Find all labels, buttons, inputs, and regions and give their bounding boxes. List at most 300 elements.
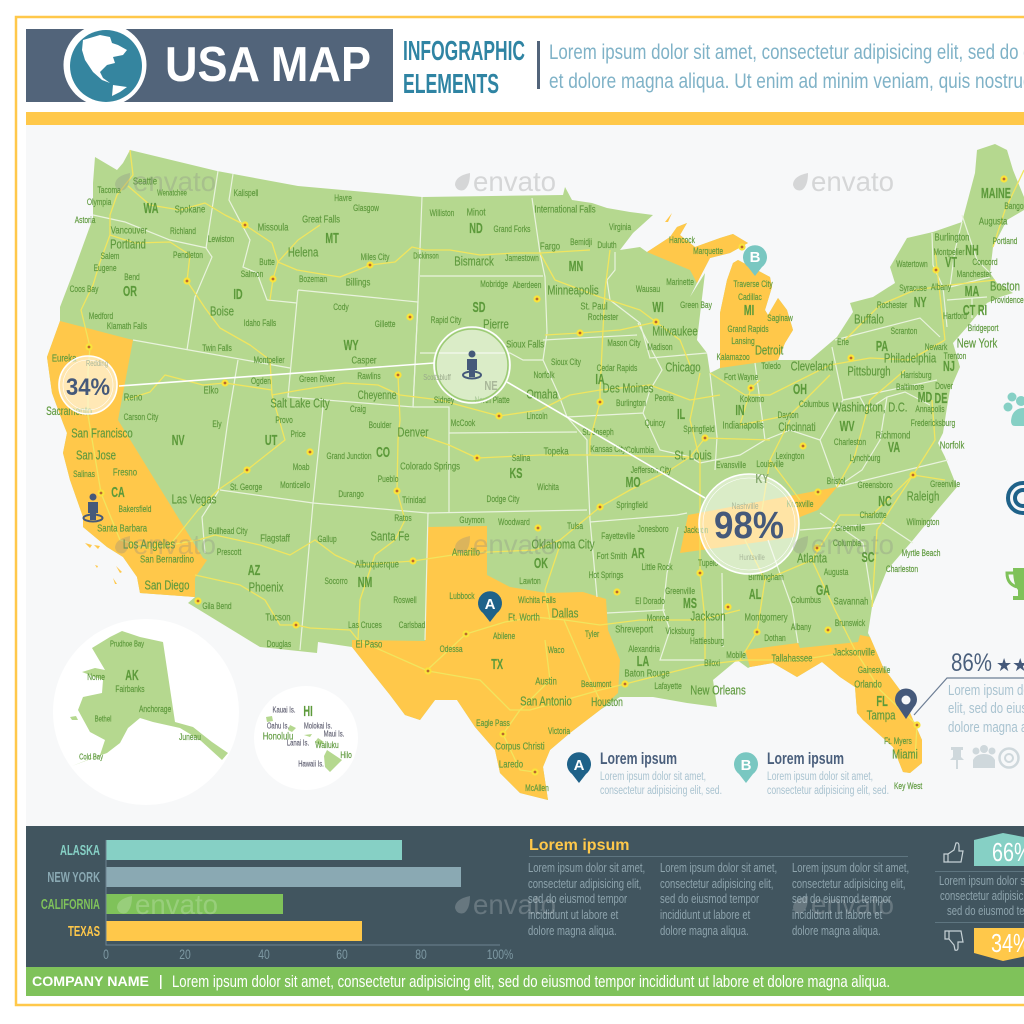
city and state labels: Sioux Falls — [506, 338, 544, 350]
legend: B: Lorem ipsum — [767, 749, 844, 768]
city and state labels: VT — [945, 254, 957, 270]
city and state labels: Olympia — [87, 197, 112, 207]
city and state labels: Tulsa — [567, 521, 584, 531]
city and state labels: Chicago — [665, 361, 701, 375]
city and state labels: Jefferson City — [631, 465, 671, 475]
city and state labels: Sacramento — [46, 406, 92, 418]
bar chart: ALASKA — [60, 842, 100, 859]
city and state labels: Pueblo — [378, 474, 399, 484]
city and state labels: Kansas City — [590, 444, 626, 454]
city and state labels: Hartford — [943, 311, 967, 321]
city and state labels: San Francisco — [71, 427, 133, 441]
city and state labels: Marquette — [693, 246, 724, 256]
city and state labels: Gillette — [375, 319, 396, 329]
city and state labels: NJ — [943, 358, 955, 374]
highlighted state: Tennessee — [680, 487, 837, 553]
city and state labels: Philadelphia — [884, 352, 937, 366]
legend: B: Lorem ipsum dolor sit amet, — [767, 771, 873, 783]
callout: person marker: NE — [484, 380, 498, 393]
city and state labels: Bismarck — [454, 255, 494, 269]
watermarks: envato — [811, 166, 894, 197]
city and state labels: TX — [491, 656, 504, 672]
city and state labels: SD — [473, 299, 485, 315]
city and state labels: Santa Barbara — [97, 522, 148, 534]
bar chart: 20 — [179, 946, 191, 962]
watermarks: envato — [473, 166, 556, 197]
city and state labels: Casper — [351, 354, 377, 366]
city and state labels: Bemidji — [570, 237, 592, 247]
header divider — [537, 41, 540, 89]
city and state labels: Birmingham — [748, 572, 784, 582]
city and state labels: St. George — [230, 482, 263, 492]
city and state labels: Minot — [467, 206, 486, 218]
city and state labels: Seattle — [133, 175, 157, 187]
city and state labels: Montpelier — [254, 355, 285, 365]
watermarks on dark panel: envato — [473, 889, 556, 920]
subtitle: INFOGRAPHIC — [403, 35, 525, 66]
city and state labels: El Dorado — [635, 596, 665, 606]
city and state labels: Houston — [591, 697, 623, 709]
city and state labels: Rochester — [588, 312, 619, 322]
city and state labels: St. Joseph — [582, 427, 614, 437]
callout: 98%: KY — [755, 473, 769, 486]
city and state labels: Rapid City — [431, 315, 461, 325]
city and state labels: Gainesville — [858, 665, 891, 675]
bar chart — [41, 840, 513, 962]
icon: target — [1008, 483, 1024, 513]
footer bar: COMPANY NAME — [32, 973, 149, 989]
icons: row of grey symbols — [950, 745, 1018, 769]
city and state labels: Montpelier — [934, 247, 965, 257]
city and state labels: Gila Bend — [202, 601, 232, 611]
city and state labels: Buffalo — [854, 313, 884, 327]
text block: Lorem ipsum columns: consectetur adipisicing elit, — [528, 878, 641, 891]
city and state labels: IA — [595, 371, 605, 387]
city and state labels: WI — [652, 299, 664, 315]
icon: people teal — [1004, 392, 1024, 426]
city and state labels: Washington, D.C. — [833, 401, 907, 415]
city and state labels: Great Falls — [302, 213, 340, 225]
city and state labels: Milwaukee — [652, 325, 698, 339]
bar chart: 60 — [336, 946, 348, 962]
city and state labels: North Platte — [475, 395, 510, 405]
city and state labels: San Diego — [145, 579, 189, 593]
legend: A — [567, 749, 722, 797]
legend: A: Lorem ipsum dolor sit amet, — [600, 771, 706, 783]
icon: pin B on map — [743, 245, 767, 276]
city and state labels: WA — [144, 200, 158, 216]
city and state labels: Cadillac — [738, 292, 762, 302]
city and state labels: Sioux City — [551, 357, 581, 367]
city and state labels: Green Bay — [680, 300, 712, 310]
text block: Lorem ipsum columns: consectetur adipisicing elit, — [660, 878, 773, 891]
city and state labels: St. Paul — [580, 300, 608, 312]
city and state labels: Grand Junction — [326, 451, 372, 461]
city and state labels: Dayton — [777, 410, 799, 420]
state borders — [93, 171, 990, 660]
watermarks on dark panel: envato — [811, 889, 894, 920]
legend: B: consectetur adipisicing elit, sed. — [767, 785, 889, 797]
city and state labels: Tacoma — [97, 185, 121, 195]
icon: pin A on map — [478, 591, 502, 622]
city and state labels: Santa Fe — [371, 530, 409, 544]
city and state labels: MN — [569, 258, 583, 274]
text block: Lorem ipsum columns: sed do eiusmod tempor — [528, 893, 627, 906]
city and state labels: Dover — [935, 381, 953, 391]
city and state labels: Watertown — [896, 259, 928, 269]
city and state labels: MA — [965, 283, 979, 299]
city and state labels: Odessa — [440, 644, 463, 654]
watermarks on dark panel: envato — [135, 889, 218, 920]
city and state labels: Providence — [990, 295, 1024, 305]
city and state labels: Missoula — [258, 221, 289, 233]
city and state labels: Ft. Worth — [508, 611, 540, 623]
city and state labels: Moab — [293, 462, 310, 472]
icon: pin B on map: B — [750, 249, 761, 266]
bar chart: 0 — [103, 946, 109, 962]
city and state labels: Syracuse — [899, 283, 927, 293]
city and state labels: IL — [677, 406, 685, 422]
city and state labels: Albuquerque — [355, 558, 399, 570]
city and state labels: Billings — [346, 276, 371, 288]
city and state labels: Bend — [124, 272, 140, 282]
city and state labels: Medford — [89, 311, 113, 321]
city and state labels: Bristol — [827, 476, 845, 486]
city and state labels: Tupelo — [698, 558, 719, 568]
city and state labels: LA — [637, 653, 649, 669]
text block: Lorem ipsum columns: dolore magna aliqua. — [528, 925, 617, 938]
city and state labels: Salem — [101, 251, 120, 261]
city and state labels: New Orleans — [690, 684, 746, 698]
legend: B: B — [741, 757, 752, 774]
header description — [549, 41, 1024, 93]
title: USA MAP — [165, 38, 371, 92]
city and state labels: Salt Lake City — [270, 397, 330, 411]
panel: Hawaii inset: Lanai Is. — [287, 740, 309, 748]
city and state labels: Louisville — [756, 459, 784, 469]
city and state labels: Wichita — [537, 482, 559, 492]
city and state labels: Saginaw — [767, 313, 793, 323]
city and state labels: Savannah — [834, 595, 868, 607]
city and state labels: MS — [683, 595, 697, 611]
city and state labels: Cleveland — [791, 360, 833, 374]
city and state labels: Richland — [170, 226, 196, 236]
callout: 86% rating: 86% — [951, 649, 992, 677]
city and state labels: Pierre — [483, 318, 509, 332]
city and state labels: Salina — [512, 453, 531, 463]
legend: A: Lorem ipsum — [600, 749, 677, 768]
city and state labels: Wichita Falls — [518, 595, 556, 605]
city and state labels: Bozeman — [299, 274, 327, 284]
city and state labels: Tyler — [585, 629, 600, 639]
city and state labels: Roswell — [393, 595, 417, 605]
bar chart: NEW YORK — [47, 869, 100, 886]
city and state labels: Victoria — [548, 726, 571, 736]
city and state labels: Douglas — [267, 639, 291, 649]
panel: bottom statistics — [26, 826, 1024, 967]
city and state labels: Portland — [110, 238, 146, 252]
city and state labels: Grand Forks — [494, 224, 531, 234]
city and state labels: Williston — [430, 208, 454, 218]
city and state labels: Dothan — [764, 633, 786, 643]
panel: Alaska inset: Cold Bay — [79, 754, 103, 762]
city and state labels: Manchester — [957, 269, 992, 279]
city and state labels: Fayetteville — [601, 531, 635, 541]
city and state labels: Columbus — [791, 595, 821, 605]
city and state labels: WY — [344, 337, 359, 353]
city and state labels: NH — [965, 242, 979, 258]
city and state labels: Concord — [972, 257, 998, 267]
city and state labels: Indianapolis — [722, 419, 764, 431]
subtitle: ELEMENTS — [403, 68, 499, 99]
city and state labels: Charleston — [834, 437, 866, 447]
city and state labels: CO — [376, 444, 390, 460]
city and state labels: Key West — [894, 781, 923, 791]
header banner — [26, 24, 393, 106]
city and state labels: Helena — [288, 246, 319, 260]
bar chart: 100% — [487, 946, 513, 962]
city and state labels: NC — [878, 493, 892, 509]
text block: Lorem ipsum columns: dolore magna aliqua. — [792, 925, 881, 938]
city and state labels: Craig — [350, 404, 366, 414]
highlighted state: Michigan — [647, 213, 793, 368]
city and state labels: Bakersfield — [119, 504, 151, 514]
city and state labels: Eureka — [52, 352, 77, 364]
city and state labels: ND — [469, 220, 483, 236]
city and state labels: Montgomery — [745, 611, 788, 623]
callout: 98%: Huntsville — [739, 554, 765, 562]
panel: Hawaii inset: Maui Is. — [324, 731, 344, 739]
city and state labels: Pittsburgh — [847, 365, 891, 379]
city and state labels: Tallahassee — [772, 652, 812, 664]
city and state labels: Augusta — [824, 567, 849, 577]
city and state labels: KS — [510, 465, 522, 481]
city and state labels: Tucson — [265, 611, 291, 623]
city and state labels: Lincoln — [526, 411, 548, 421]
city and state labels: Socorro — [324, 576, 348, 586]
city and state labels: Abilene — [493, 631, 516, 641]
yellow band — [26, 112, 1024, 125]
icon: pin A on map: A — [485, 596, 496, 613]
city and state labels: Trinidad — [402, 495, 426, 505]
city and state labels: Omaha — [526, 388, 558, 402]
city and state labels: Atlanta — [797, 552, 828, 566]
city and state labels: OK — [534, 555, 548, 571]
city and state labels: Springfield — [616, 500, 648, 510]
city and state labels: Mason City — [607, 338, 641, 348]
watermarks: envato — [473, 529, 556, 560]
city and state labels: Jamestown — [505, 253, 539, 263]
city and state labels: Erie — [837, 337, 850, 347]
city and state labels: Cedar Rapids — [597, 363, 637, 373]
city and state labels: Eugene — [94, 263, 117, 273]
city and state labels: Sidney — [434, 395, 454, 405]
city and state labels: Greensboro — [858, 480, 893, 490]
city and state labels: Eagle Pass — [476, 718, 510, 728]
icon: thumb down — [945, 931, 963, 950]
text block: Lorem ipsum columns: incididunt ut labore et — [528, 909, 618, 922]
city and state labels: Glasgow — [353, 203, 379, 213]
city and state labels: Woodward — [498, 517, 530, 527]
city and state labels: Springfield — [683, 424, 715, 434]
city and state labels: VA — [888, 439, 900, 455]
city and state labels: Peoria — [654, 393, 674, 403]
city and state labels: Kalamazoo — [716, 352, 750, 362]
city and state labels: Aberdeen — [513, 280, 541, 290]
city and state labels: MI — [744, 302, 754, 318]
text block: Lorem ipsum columns: consectetur adipisicing elit, — [792, 878, 905, 891]
rating: thumbs up and down — [935, 833, 1024, 961]
city and state labels: Baton Rouge — [624, 667, 670, 679]
text block: Lorem ipsum columns: incididunt ut labore et — [660, 909, 750, 922]
city and state labels: Boston — [990, 280, 1020, 294]
city and state labels: Prescott — [217, 547, 242, 557]
footer bar — [26, 967, 1024, 996]
city and state labels: CA — [111, 484, 125, 500]
city and state labels: Greenville — [835, 523, 866, 533]
city and state labels: Marinette — [666, 277, 694, 287]
city and state labels: Scranton — [891, 326, 917, 336]
city and state labels: DE — [935, 390, 947, 406]
callout: 98%: 98% — [714, 505, 784, 547]
city and state labels: Mobile — [726, 650, 746, 660]
city and state labels: Myrtle Beach — [902, 548, 940, 558]
city and state labels: Wenatchee — [157, 190, 187, 198]
callout: 34% — [59, 356, 117, 414]
city and state labels: Rochester — [877, 300, 908, 310]
city and state labels: Havre — [334, 193, 352, 203]
city and state labels: Trenton — [944, 351, 966, 361]
city and state labels: Lexington — [776, 451, 804, 461]
panel: Alaska inset: Anchorage — [139, 704, 172, 714]
watermarks on dark panel — [117, 889, 894, 920]
city and state labels: McAllen — [525, 783, 549, 793]
city and state labels: Astoria — [75, 215, 96, 225]
city and state labels: San Antonio — [520, 695, 572, 709]
text block: Lorem ipsum columns: Lorem ipsum dolor sit amet, — [792, 862, 909, 875]
city and state labels: Carlsbad — [399, 620, 425, 630]
icon: person marker California — [84, 494, 102, 522]
city and state labels: Richmond — [876, 429, 910, 441]
city and state labels: Flagstaff — [260, 532, 290, 544]
city and state labels: McCook — [451, 418, 475, 428]
city and state labels: Duluth — [597, 240, 617, 250]
city and state labels: Los Angeles — [123, 538, 175, 552]
city and state labels: Fargo — [540, 240, 560, 252]
city and state labels: MD — [918, 389, 932, 405]
city and state labels: Price — [291, 429, 306, 439]
city and state labels: Topeka — [544, 445, 569, 457]
city and state labels: Idaho Falls — [244, 318, 276, 328]
city and state labels: AR — [631, 545, 645, 561]
city and state labels: Fresno — [113, 466, 137, 478]
panel: Hawaii inset: Hilo — [340, 750, 352, 760]
city and state labels: Grand Rapids — [727, 324, 769, 334]
city and state labels: Madison — [647, 342, 673, 352]
city and state labels: Corpus Christi — [495, 740, 545, 752]
panel: Alaska inset: Nome — [87, 672, 105, 682]
city and state labels: Dallas — [552, 607, 579, 621]
city and state labels: Norfolk — [940, 439, 965, 451]
legend: A: consectetur adipisicing elit, sed. — [600, 785, 722, 797]
city and state labels: Twin Falls — [202, 343, 232, 353]
city and state labels: Dodge City — [487, 494, 519, 504]
city and state labels: Guymon — [459, 515, 485, 525]
city and state labels: El Paso — [356, 638, 382, 650]
panel: Hawaii inset — [254, 686, 358, 790]
city and state labels: Burlington — [935, 231, 969, 243]
city and state labels: Greenville — [930, 479, 961, 489]
text block: Lorem ipsum columns: dolore magna aliqua. — [660, 925, 749, 938]
panel: Alaska inset: AK — [125, 667, 139, 683]
city and state labels: Denver — [398, 426, 429, 440]
text block: Lorem ipsum columns: Lorem ipsum — [529, 837, 629, 854]
city and state labels: Wausau — [636, 284, 660, 294]
city and state labels: Lawton — [519, 576, 541, 586]
panel: Alaska inset: Juneau — [179, 732, 201, 742]
city and state labels: Miles City — [361, 252, 389, 262]
city and state labels: Lubbock — [449, 591, 475, 601]
city and state labels: Colorado Springs — [400, 460, 460, 472]
text block: Lorem ipsum columns: sed do eiusmod tempor — [660, 893, 759, 906]
panel: Hawaii inset: Wailuku — [315, 740, 339, 750]
bar chart: CALIFORNIA — [41, 896, 100, 913]
map panel background — [26, 125, 1024, 826]
callout: 34%: 34% — [66, 374, 110, 401]
watermarks: envato — [133, 529, 216, 560]
city and state labels: Shreveport — [615, 623, 653, 635]
city and state labels: Lewiston — [208, 234, 234, 244]
city and state labels: Klamath Falls — [107, 321, 147, 331]
city and state labels: Bridgeport — [968, 323, 999, 333]
city and state labels: Detroit — [755, 344, 784, 358]
city and state labels: MO — [626, 474, 641, 490]
city and state labels: Ratos — [394, 513, 412, 523]
city and state labels: Fort Smith — [597, 551, 627, 561]
city and state labels: Tampa — [867, 709, 896, 723]
city and state labels: Kalispell — [234, 188, 259, 198]
callout: 98%: Nashville — [732, 501, 759, 511]
callout: 34%: Redding — [86, 360, 108, 368]
panel: Hawaii inset: Kauai Is. — [273, 707, 296, 715]
panel: Alaska inset — [53, 619, 239, 805]
city and state labels: MT — [325, 230, 339, 246]
city and state labels: Beaumont — [581, 679, 612, 689]
city and state labels: Elko — [203, 384, 219, 396]
city and state labels: AL — [749, 586, 762, 602]
city and state labels: St. Louis — [674, 449, 712, 463]
city and state labels: Salinas — [73, 469, 95, 479]
city and state labels: Monticello — [280, 480, 311, 490]
highlighted state: California — [47, 321, 207, 597]
city and state labels: Ogden — [251, 376, 271, 386]
city and state labels: Miami — [892, 748, 918, 762]
panel: Hawaii inset: Molokai Is. — [304, 723, 332, 731]
text block: Lorem ipsum columns: Lorem ipsum dolor sit amet, — [528, 862, 645, 875]
city and state labels: Butte — [259, 257, 275, 267]
city and state labels: Boulder — [369, 420, 392, 430]
city and state labels: Albany — [931, 282, 951, 292]
city and state labels: Harrisburg — [900, 370, 932, 380]
city and state labels: Quincy — [645, 418, 665, 428]
legend: A: A — [574, 757, 585, 774]
city and state labels: Raleigh — [907, 490, 939, 504]
city and state labels: Cody — [333, 302, 349, 312]
legend: B — [734, 749, 889, 797]
city and state labels: Vicksburg — [665, 626, 695, 636]
subtitle — [403, 35, 525, 99]
city and state labels: Laredo — [499, 758, 523, 770]
